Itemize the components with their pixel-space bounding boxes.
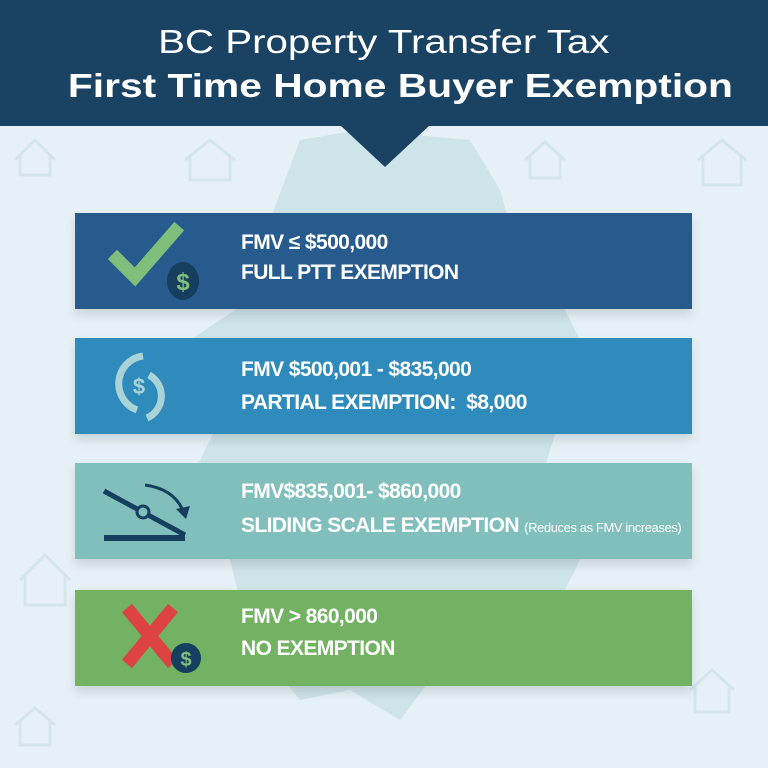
title (68, 23, 733, 104)
text: FMV ≤ $500,000 (241, 231, 388, 254)
panel: partial exemption (75, 338, 692, 434)
panel: full exemption (75, 213, 692, 309)
panel: sliding scale (75, 463, 692, 559)
header pointer (340, 125, 430, 167)
icon: red X with dollar (122, 604, 201, 673)
text (241, 231, 458, 284)
icon: circular dollar (115, 352, 165, 422)
text: PARTIAL EXEMPTION: $8,000 (241, 391, 527, 414)
text (241, 480, 681, 537)
text: FMV $500,001 - $835,000 (241, 358, 471, 381)
icon: check with dollar (108, 222, 199, 300)
header banner (0, 0, 768, 126)
text (241, 605, 395, 660)
icon: circular dollar: $ (133, 374, 145, 399)
title: First Time Home Buyer Exemption (68, 67, 733, 104)
title: BC Property Transfer Tax (158, 23, 609, 60)
icon: check with dollar: $ (176, 269, 190, 296)
text: SLIDING SCALE EXEMPTION (Reduces as FMV increases) (241, 514, 681, 537)
text: FMV$835,001- $860,000 (241, 480, 461, 503)
panel: no exemption (75, 590, 692, 686)
text: FULL PTT EXEMPTION (241, 261, 458, 284)
icon: red X with dollar: $ (180, 649, 192, 671)
text: FMV > 860,000 (241, 605, 377, 628)
text: NO EXEMPTION (241, 637, 395, 660)
icon: sliding scale (102, 484, 190, 541)
text (241, 358, 527, 414)
